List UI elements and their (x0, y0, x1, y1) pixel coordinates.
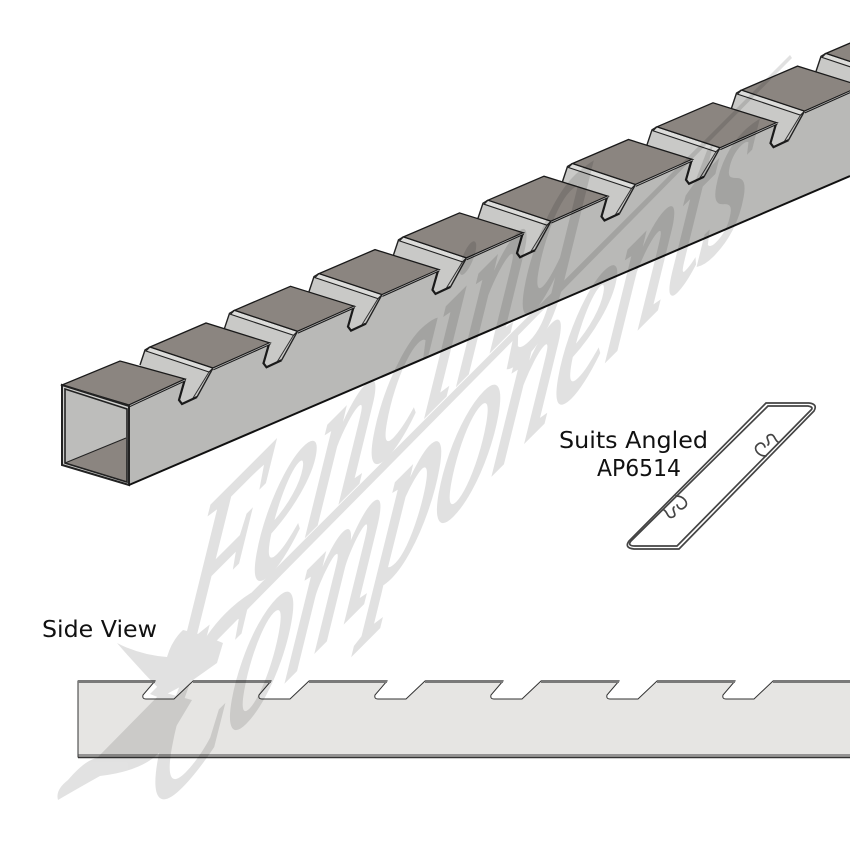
label: Side View: Side View (42, 617, 157, 643)
label: Suits Angled AP6514 (559, 428, 708, 482)
front end plate (62, 361, 185, 406)
open tube end (62, 385, 129, 485)
side view profile (78, 681, 850, 758)
label: Suits Angled AP6514: Suits Angled (559, 428, 708, 454)
tube side face (129, 92, 850, 485)
tube bottom edge (129, 176, 850, 485)
3D notched tube (62, 0, 850, 485)
icon: angled post cross-section (627, 403, 815, 549)
notches and top plates (140, 0, 850, 404)
watermark word Fencing: Fencing (162, 60, 613, 720)
watermark flourish (57, 55, 792, 800)
label: Suits Angled AP6514: AP6514 (597, 456, 681, 482)
watermark word Components: Components (133, 19, 779, 850)
